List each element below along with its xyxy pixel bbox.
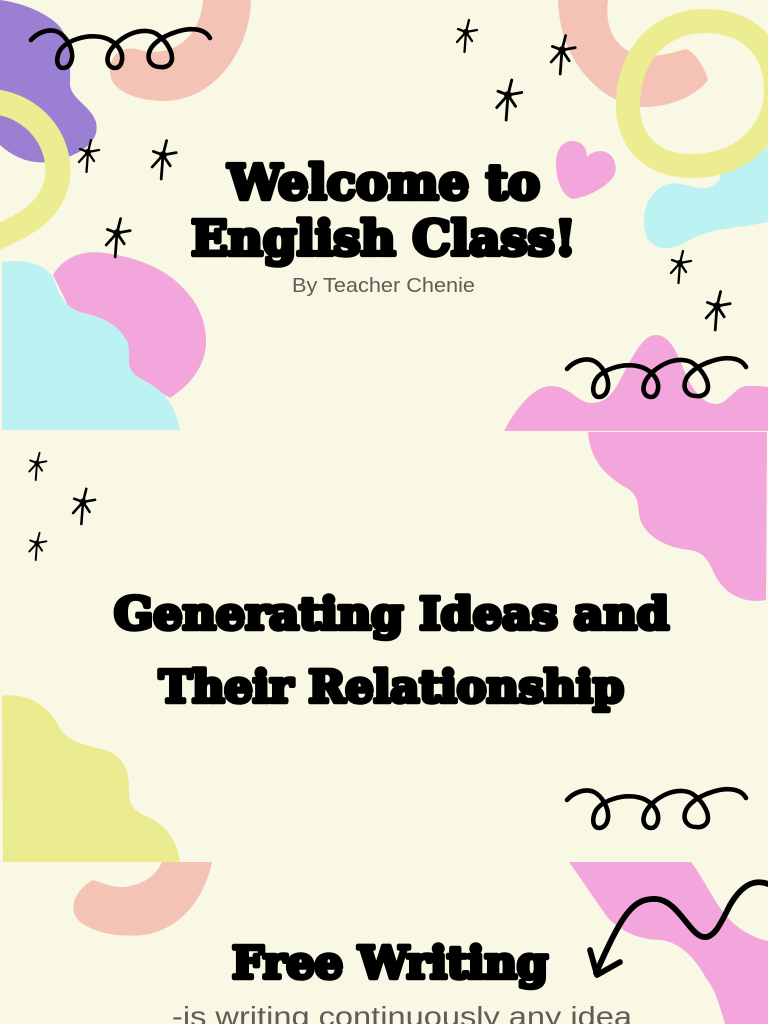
stars: top right cluster — [457, 20, 730, 330]
squiggle: top left — [31, 29, 210, 68]
stars: top left cluster — [79, 140, 176, 257]
ring: yellow top left — [0, 101, 58, 240]
icon: pink heart — [556, 141, 616, 199]
squiggle: slide two right — [567, 789, 746, 828]
heading: generating ideas: Generating Ideas and — [114, 589, 669, 640]
heading: generating ideas: Their Relationship — [159, 662, 624, 713]
stars: slide two cluster — [29, 453, 95, 560]
arrow: wavy down left — [590, 882, 768, 975]
heading: free writing: Free Writing — [232, 938, 548, 989]
title: welcome: Welcome to — [227, 155, 540, 211]
blob: purple top left — [0, 0, 97, 162]
blob: pink right slide two — [588, 432, 767, 601]
blob: light blue right — [644, 147, 768, 248]
squiggle: slide one right — [567, 358, 746, 397]
blob: peach arc bottom — [73, 862, 212, 936]
ring: yellow top right — [628, 21, 768, 166]
blob: yellow bottom left — [2, 695, 180, 862]
blob: pink bottom right — [569, 862, 768, 1024]
blob: pink left — [53, 252, 206, 398]
blob: light blue left — [2, 261, 180, 430]
title: welcome: English Class! — [191, 211, 576, 267]
blob: peach arc top right — [558, 0, 708, 107]
blob: peach arc top left — [110, 0, 251, 101]
blob: pink hill right — [504, 335, 768, 431]
subtitle: author: By Teacher Chenie — [292, 275, 475, 297]
heading: generating ideas — [114, 589, 669, 713]
title: welcome — [191, 155, 576, 267]
